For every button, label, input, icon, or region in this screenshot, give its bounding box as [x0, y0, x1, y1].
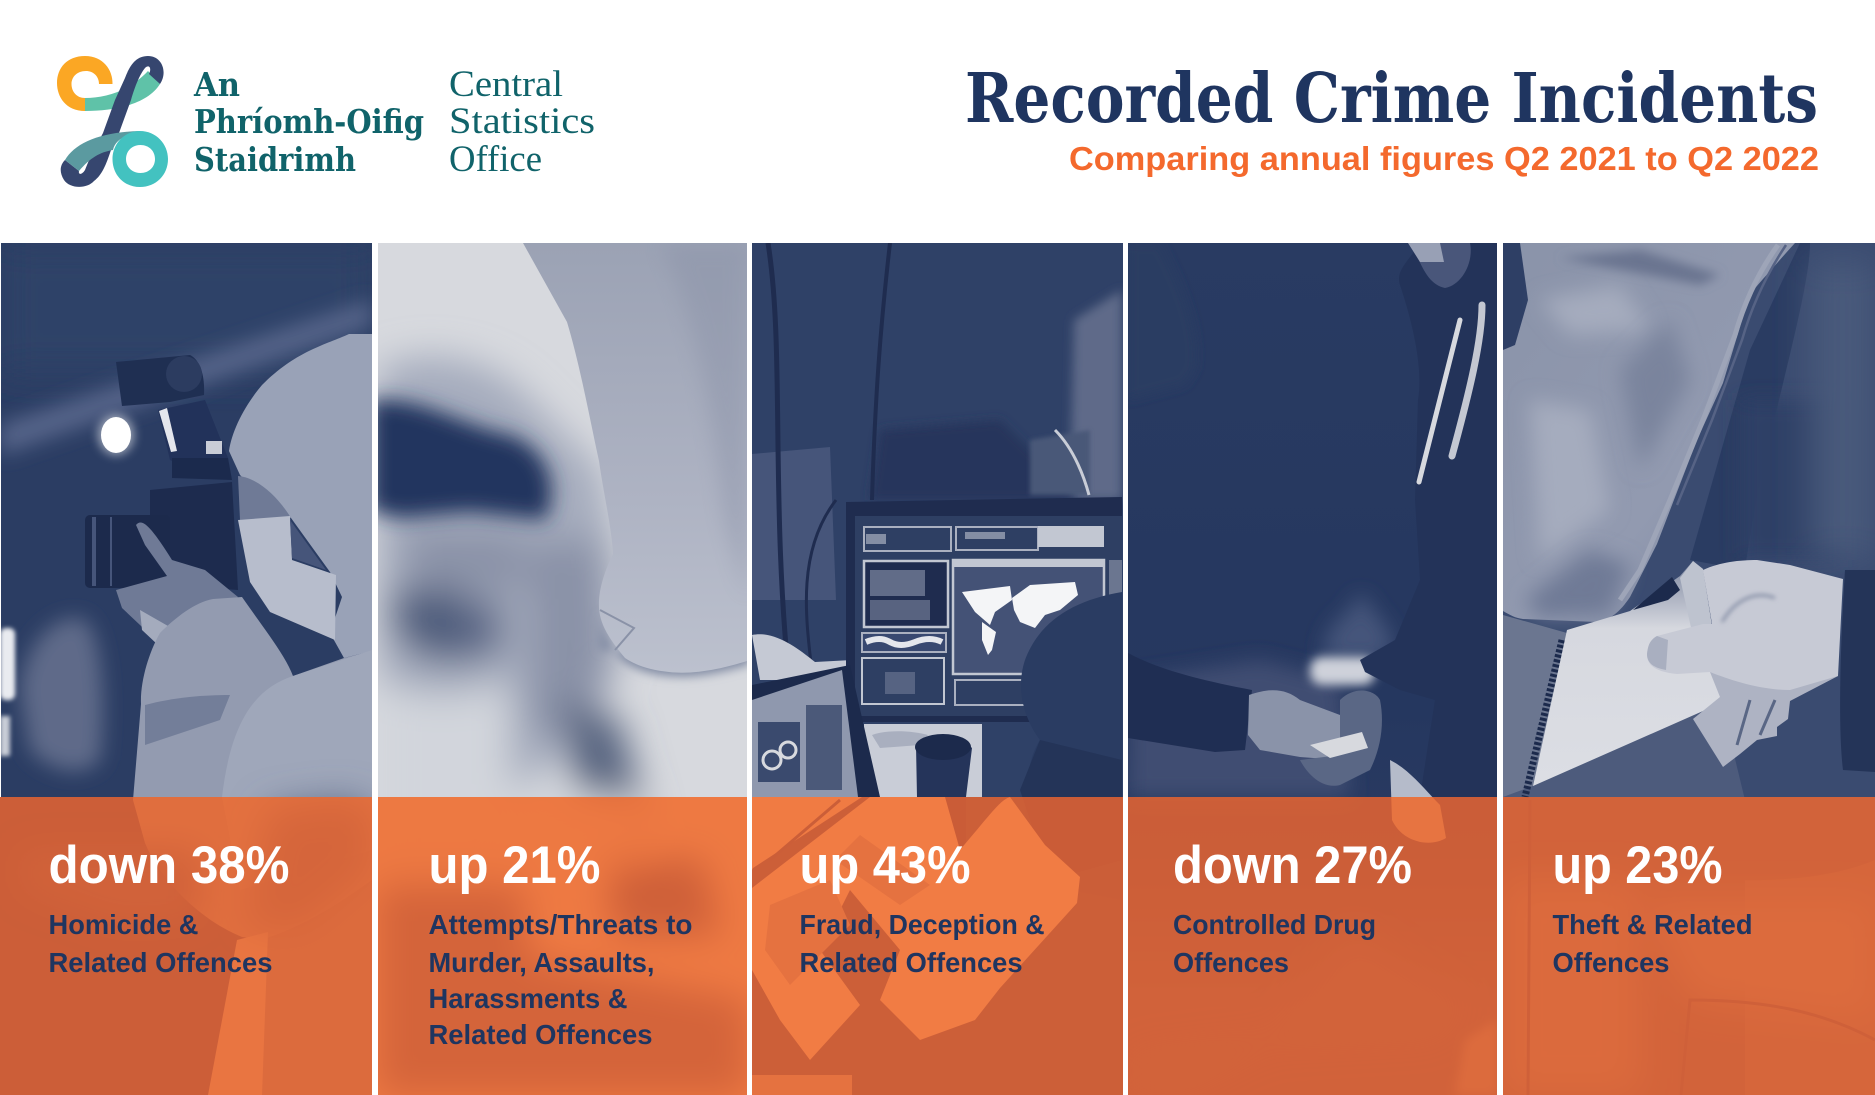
stat: up 43%: up 43%: [800, 836, 970, 895]
logo text: English: Central: [449, 64, 563, 105]
label: attempts and threats: Related Offences: [428, 1019, 652, 1050]
label: attempts and threats: Murder, Assaults,: [428, 947, 654, 978]
hooded figure: [1021, 592, 1122, 722]
label: attempts and threats: Harassments &: [428, 983, 628, 1014]
logo mark: [57, 56, 168, 187]
panel: threats and assaults: [370, 243, 750, 1095]
laptop: [752, 665, 880, 797]
photo: phone pickpocket: [1503, 243, 1875, 797]
panel: theft: [1503, 243, 1875, 1095]
hand and thumb: [1647, 560, 1843, 690]
label: controlled drugs: Offences: [1173, 947, 1289, 978]
panel: drugs: [1128, 243, 1497, 1095]
lower jacket and jeans: [1503, 615, 1567, 800]
label: fraud: [800, 909, 1044, 978]
blurred hair: [370, 399, 552, 520]
orange stat band: [0, 797, 372, 1095]
hands: [1248, 690, 1340, 758]
flash: [116, 355, 204, 406]
label: homicide: Homicide &: [48, 909, 198, 940]
photo: hand-to-hand deal: [1128, 243, 1497, 797]
phone: [1533, 561, 1722, 786]
left sleeve: [1128, 653, 1252, 752]
camera: [150, 482, 238, 590]
photo: hacker at monitor: [752, 243, 1123, 797]
stat: down 38%: down 38%: [48, 836, 290, 895]
right man: [1360, 243, 1497, 680]
logo text: Irish: [193, 65, 424, 179]
dark cuff: [1840, 570, 1875, 772]
laptop base and keyboard: [752, 797, 862, 870]
panel: fraud: [752, 243, 1123, 1095]
label: controlled drugs: [1173, 909, 1376, 978]
logo text: English: Statistics: [449, 101, 595, 142]
glove: [116, 522, 238, 627]
photo: raised fist: [378, 243, 747, 797]
label: theft: Offences: [1552, 947, 1670, 978]
sleeve: [1503, 243, 1795, 622]
logo text: Irish: An: [193, 65, 240, 104]
logo text: English: [449, 64, 595, 180]
label: homicide: Related Offences: [48, 947, 272, 978]
photo: forensic photographer: [1, 243, 372, 797]
label: homicide: [48, 909, 272, 978]
orange stat band: [752, 797, 1123, 1095]
logo text: Irish: Phríomh-Oifig: [194, 102, 424, 141]
fingers behind phone: [1693, 672, 1838, 767]
suit: [229, 334, 372, 658]
logo text: English: Office: [449, 139, 542, 180]
arm and fist: [523, 243, 747, 673]
label: attempts and threats: [428, 909, 692, 1050]
orange stat band: [1503, 797, 1875, 1095]
label: attempts and threats: Attempts/Threats to: [428, 909, 692, 940]
label: fraud: Fraud, Deception &: [800, 909, 1044, 940]
shadow under fist: [598, 630, 747, 682]
stat: down 27%: down 27%: [1173, 836, 1412, 895]
subtitle: Comparing annual figures Q2 2021 to Q2 2022: [1069, 141, 1819, 178]
logo: Central Statistics Office: [57, 56, 595, 187]
logo text: Irish: Staidrimh: [194, 140, 356, 179]
label: theft: [1552, 909, 1752, 978]
orange stat band: [378, 797, 747, 1095]
stat: up 21%: up 21%: [428, 836, 600, 895]
panel: homicide: [0, 243, 372, 1095]
orange stat band: [1128, 797, 1497, 1095]
label: theft: Theft & Related: [1552, 909, 1752, 940]
label: controlled drugs: Controlled Drug: [1173, 909, 1376, 940]
stat: up 23%: up 23%: [1552, 836, 1722, 895]
label: fraud: Related Offences: [800, 947, 1022, 978]
